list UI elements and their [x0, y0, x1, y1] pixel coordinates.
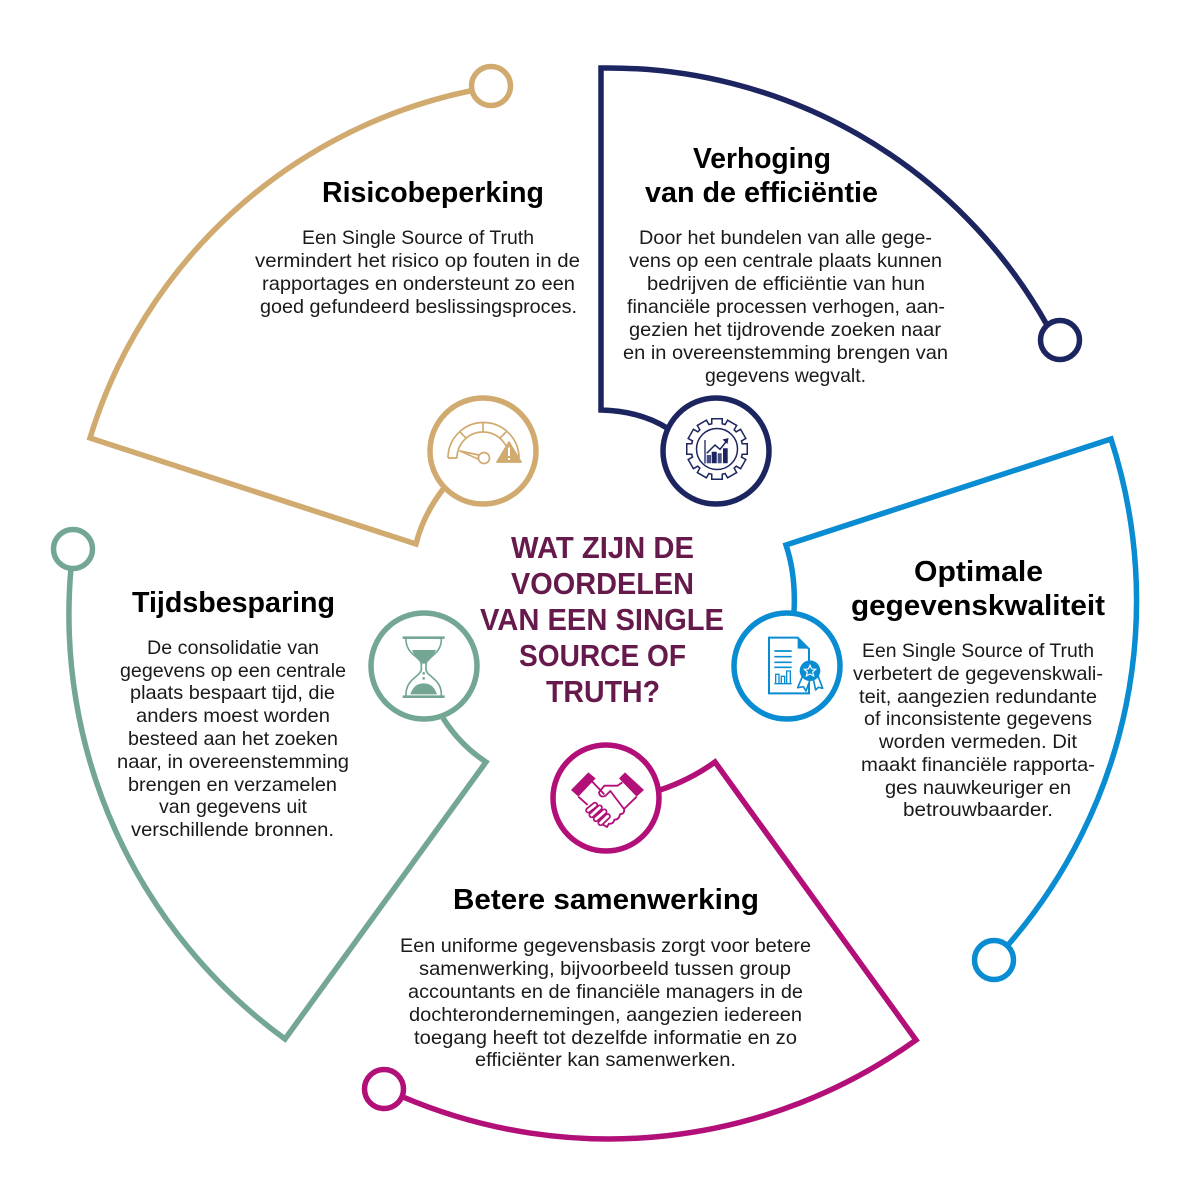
title — [480, 530, 724, 709]
text block: gegevenskwaliteit: verbetert de gegevenskwali- — [853, 663, 1103, 685]
text block: efficientie: gegevens wegvalt. — [705, 365, 866, 387]
panel: optimale gegevenskwaliteit — [734, 439, 1137, 980]
text block: samenwerking: efficiënter kan samenwerken. — [475, 1049, 736, 1071]
heading: optimale gegevenskwaliteit — [851, 556, 1105, 622]
panel outline: risicobeperking — [90, 91, 470, 544]
text block: efficientie: Door het bundelen van alle gege- — [639, 227, 932, 249]
text block: tijdsbesparing: plaats bespaart tijd, die — [130, 682, 335, 704]
title: WAT ZIJN DE — [511, 530, 694, 565]
icon: gauge with warning — [430, 398, 536, 504]
text block: tijdsbesparing: anders moest worden — [136, 705, 330, 727]
text block: samenwerking: dochterondernemingen, aangezien iedereen — [409, 1004, 802, 1026]
panel outline: tijdsbesparing — [69, 568, 486, 1039]
end marker: tijdsbesparing — [54, 530, 92, 568]
end marker: risicobeperking — [472, 66, 510, 106]
text block: efficientie: vens op een centrale plaats kunnen — [629, 250, 942, 272]
panel outline: efficientie — [601, 68, 1047, 428]
text block: samenwerking: accountants en de financiële managers in de — [408, 981, 803, 1003]
title: VAN EEN SINGLE — [480, 602, 724, 637]
panel outline: gegevenskwaliteit — [786, 439, 1137, 945]
panel: betere samenwerking — [364, 745, 916, 1139]
icon: certified document — [734, 613, 840, 719]
text block: tijdsbesparing: De consolidatie van — [147, 637, 319, 659]
text block: efficientie: gezien het tijdrovende zoeken naar — [629, 319, 942, 341]
text block: gegevenskwaliteit: Een Single Source of Truth — [862, 640, 1094, 662]
heading: verhoging van de efficientie: van de efficiëntie — [645, 177, 878, 209]
title: TRUTH? — [546, 674, 660, 709]
text block: tijdsbesparing: naar, in overeenstemming — [117, 751, 349, 773]
heading: optimale gegevenskwaliteit: gegevenskwaliteit — [851, 590, 1105, 622]
text block: samenwerking — [400, 935, 811, 1071]
text block: samenwerking: samenwerking, bijvoorbeeld tussen group — [419, 958, 791, 980]
panel outline: samenwerking — [403, 762, 916, 1139]
text block: samenwerking: toegang heeft tot dezelfde informatie en zo — [414, 1027, 797, 1049]
text block: gegevenskwaliteit: teit, aangezien redundante — [859, 686, 1097, 708]
text block: tijdsbesparing: besteed aan het zoeken — [128, 728, 338, 750]
heading: verhoging van de efficientie — [645, 143, 878, 209]
icon: gear with growth chart — [663, 398, 769, 504]
text block: risicobeperking: vermindert het risico op fouten in de — [255, 250, 580, 272]
text block: tijdsbesparing: brengen en verzamelen — [128, 774, 337, 796]
panel: risicobeperking — [90, 66, 580, 544]
text block: efficientie: financiële processen verhogen, aan- — [627, 296, 945, 318]
title: VOORDELEN — [511, 566, 694, 601]
end marker: samenwerking — [364, 1070, 404, 1108]
text block: gegevenskwaliteit: ges nauwkeuriger en — [885, 777, 1071, 799]
icon: hourglass — [371, 613, 477, 719]
text block: gegevenskwaliteit: of inconsistente gegevens — [864, 708, 1092, 730]
text block: tijdsbesparing: verschillende bronnen. — [131, 819, 334, 841]
text block: tijdsbesparing — [117, 637, 349, 841]
text block: risicobeperking: goed gefundeerd beslissingsproces. — [260, 296, 577, 318]
end marker: efficientie — [1040, 320, 1080, 360]
text block: efficientie: en in overeenstemming brengen van — [623, 342, 948, 364]
heading: verhoging van de efficientie: Verhoging — [693, 143, 831, 175]
text block: risicobeperking — [255, 227, 580, 318]
text block: gegevenskwaliteit: betrouwbaarder. — [903, 799, 1053, 821]
panel: tijdsbesparing — [54, 530, 486, 1039]
title: SOURCE OF — [519, 638, 686, 673]
text block: risicobeperking: Een Single Source of Truth — [302, 227, 534, 249]
text block: gegevenskwaliteit: maakt financiële rapporta- — [861, 754, 1095, 776]
text block: efficientie: bedrijven de efficiëntie van hun — [647, 273, 925, 295]
text block: tijdsbesparing: gegevens op een centrale — [120, 660, 346, 682]
heading: tijdsbesparing: Tijdsbesparing — [132, 587, 335, 619]
heading: betere samenwerking: Betere samenwerking — [453, 884, 759, 916]
text block: risicobeperking: rapportages en ondersteunt zo een — [262, 273, 575, 295]
text block: gegevenskwaliteit — [853, 640, 1103, 821]
icon: handshake — [553, 745, 659, 851]
panel: verhoging van de efficientie — [601, 68, 1080, 504]
text block: tijdsbesparing: van gegevens uit — [159, 796, 308, 818]
heading: risicobeperking: Risicobeperking — [322, 177, 544, 209]
text block: efficientie — [623, 227, 948, 387]
end marker: gegevenskwaliteit — [974, 940, 1014, 980]
heading: optimale gegevenskwaliteit: Optimale — [914, 556, 1043, 588]
text block: samenwerking: Een uniforme gegevensbasis zorgt voor betere — [400, 935, 811, 957]
text block: gegevenskwaliteit: worden vermeden. Dit — [878, 731, 1078, 753]
